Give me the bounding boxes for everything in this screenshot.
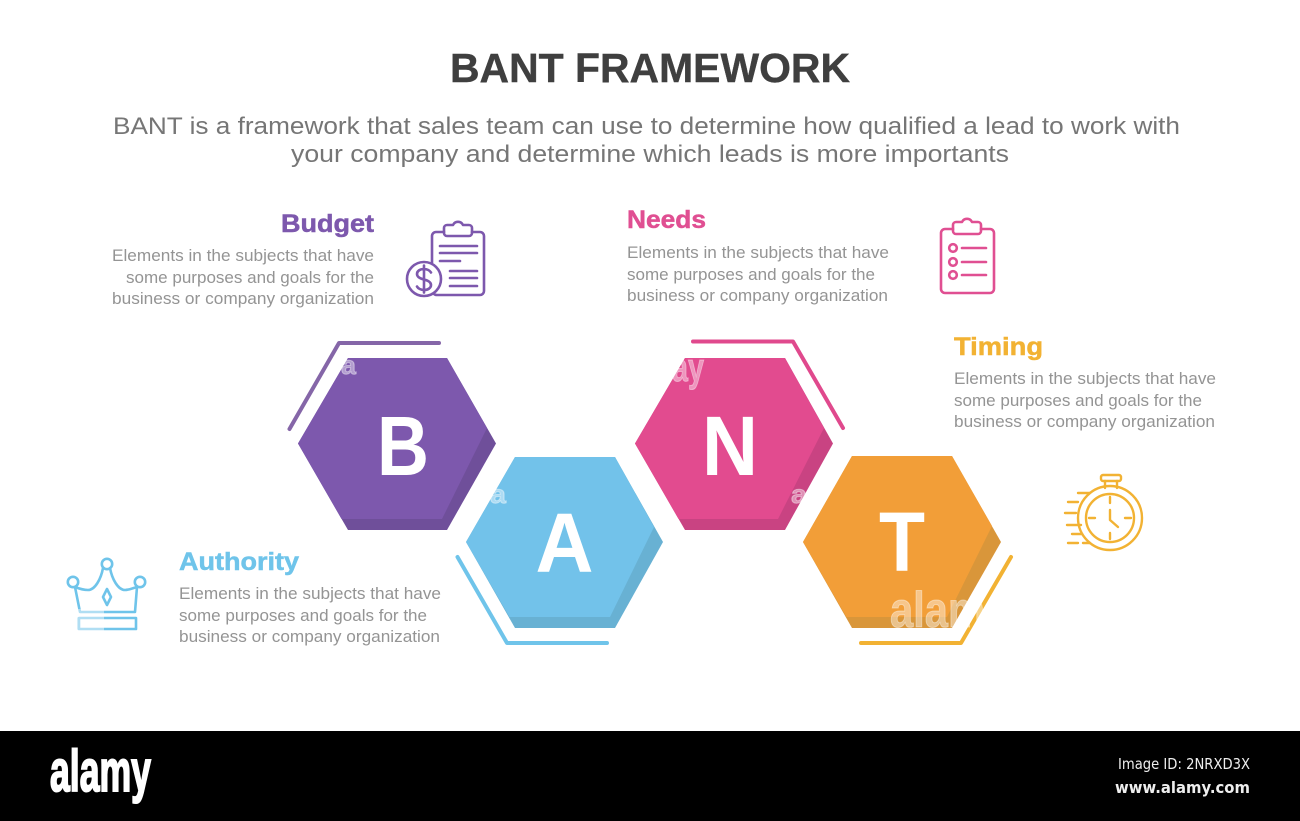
watermark fragments: ay [672,346,705,390]
hexagon: A: A [536,496,594,590]
icon: budget clipboard with coin [407,222,484,296]
panel: authority text [179,548,441,646]
hexagon: B: B [377,399,429,493]
panel: timing text: business or company organization [954,413,1215,431]
subtitle [113,113,1180,168]
panel: budget text: some purposes and goals for the [126,269,374,287]
watermark fragments: a [490,479,507,509]
panel: authority text: Authority [179,548,299,576]
hexagon: N: N [702,399,758,493]
hexagon: T [803,456,1011,643]
panel: timing text: Elements in the subjects that have [954,370,1216,388]
watermark fragments: a [791,479,808,509]
subtitle: BANT is a framework that sales team can use to determine how qualified a lead to work with [113,113,1180,140]
panel: timing text [954,333,1216,431]
icon: timing stopwatch [1065,475,1142,550]
panel: authority text: Elements in the subjects that have [179,585,441,603]
subtitle: your company and determine which leads is more importants [291,141,1009,168]
panel: timing text: some purposes and goals for the [954,392,1202,410]
hexagon: N [635,342,843,530]
panel: authority text: some purposes and goals for the [179,607,427,625]
panel: needs text: Elements in the subjects that have [627,244,889,262]
icon: needs checklist clipboard [941,219,994,293]
panel: needs text: some purposes and goals for the [627,266,875,284]
hexagon: T: T [879,495,925,589]
hexagon: A [458,457,663,643]
footer bar [0,731,1300,821]
panel: budget text [112,210,375,308]
watermark fragments [341,346,985,638]
watermark fragments: alam [890,582,985,638]
website: www.alamy.com [1115,778,1250,797]
footer logo: alamy [50,739,151,804]
panel: budget text: Budget [281,210,375,238]
panel: timing text: Timing [954,333,1043,361]
title: BANT FRAMEWORK [450,45,850,91]
hexagon: B [290,343,496,530]
panel: authority text: business or company organization [179,628,440,646]
panel: budget text: business or company organization [112,290,374,308]
panel: needs text: business or company organization [627,287,888,305]
icon: authority crown [68,559,145,631]
image id: Image ID: 2NRXD3X [1118,755,1250,773]
panel: budget text: Elements in the subjects that have [112,247,374,265]
panel: needs text [627,206,889,305]
panel: needs text: Needs [627,206,706,234]
watermark fragments: a [341,350,357,380]
